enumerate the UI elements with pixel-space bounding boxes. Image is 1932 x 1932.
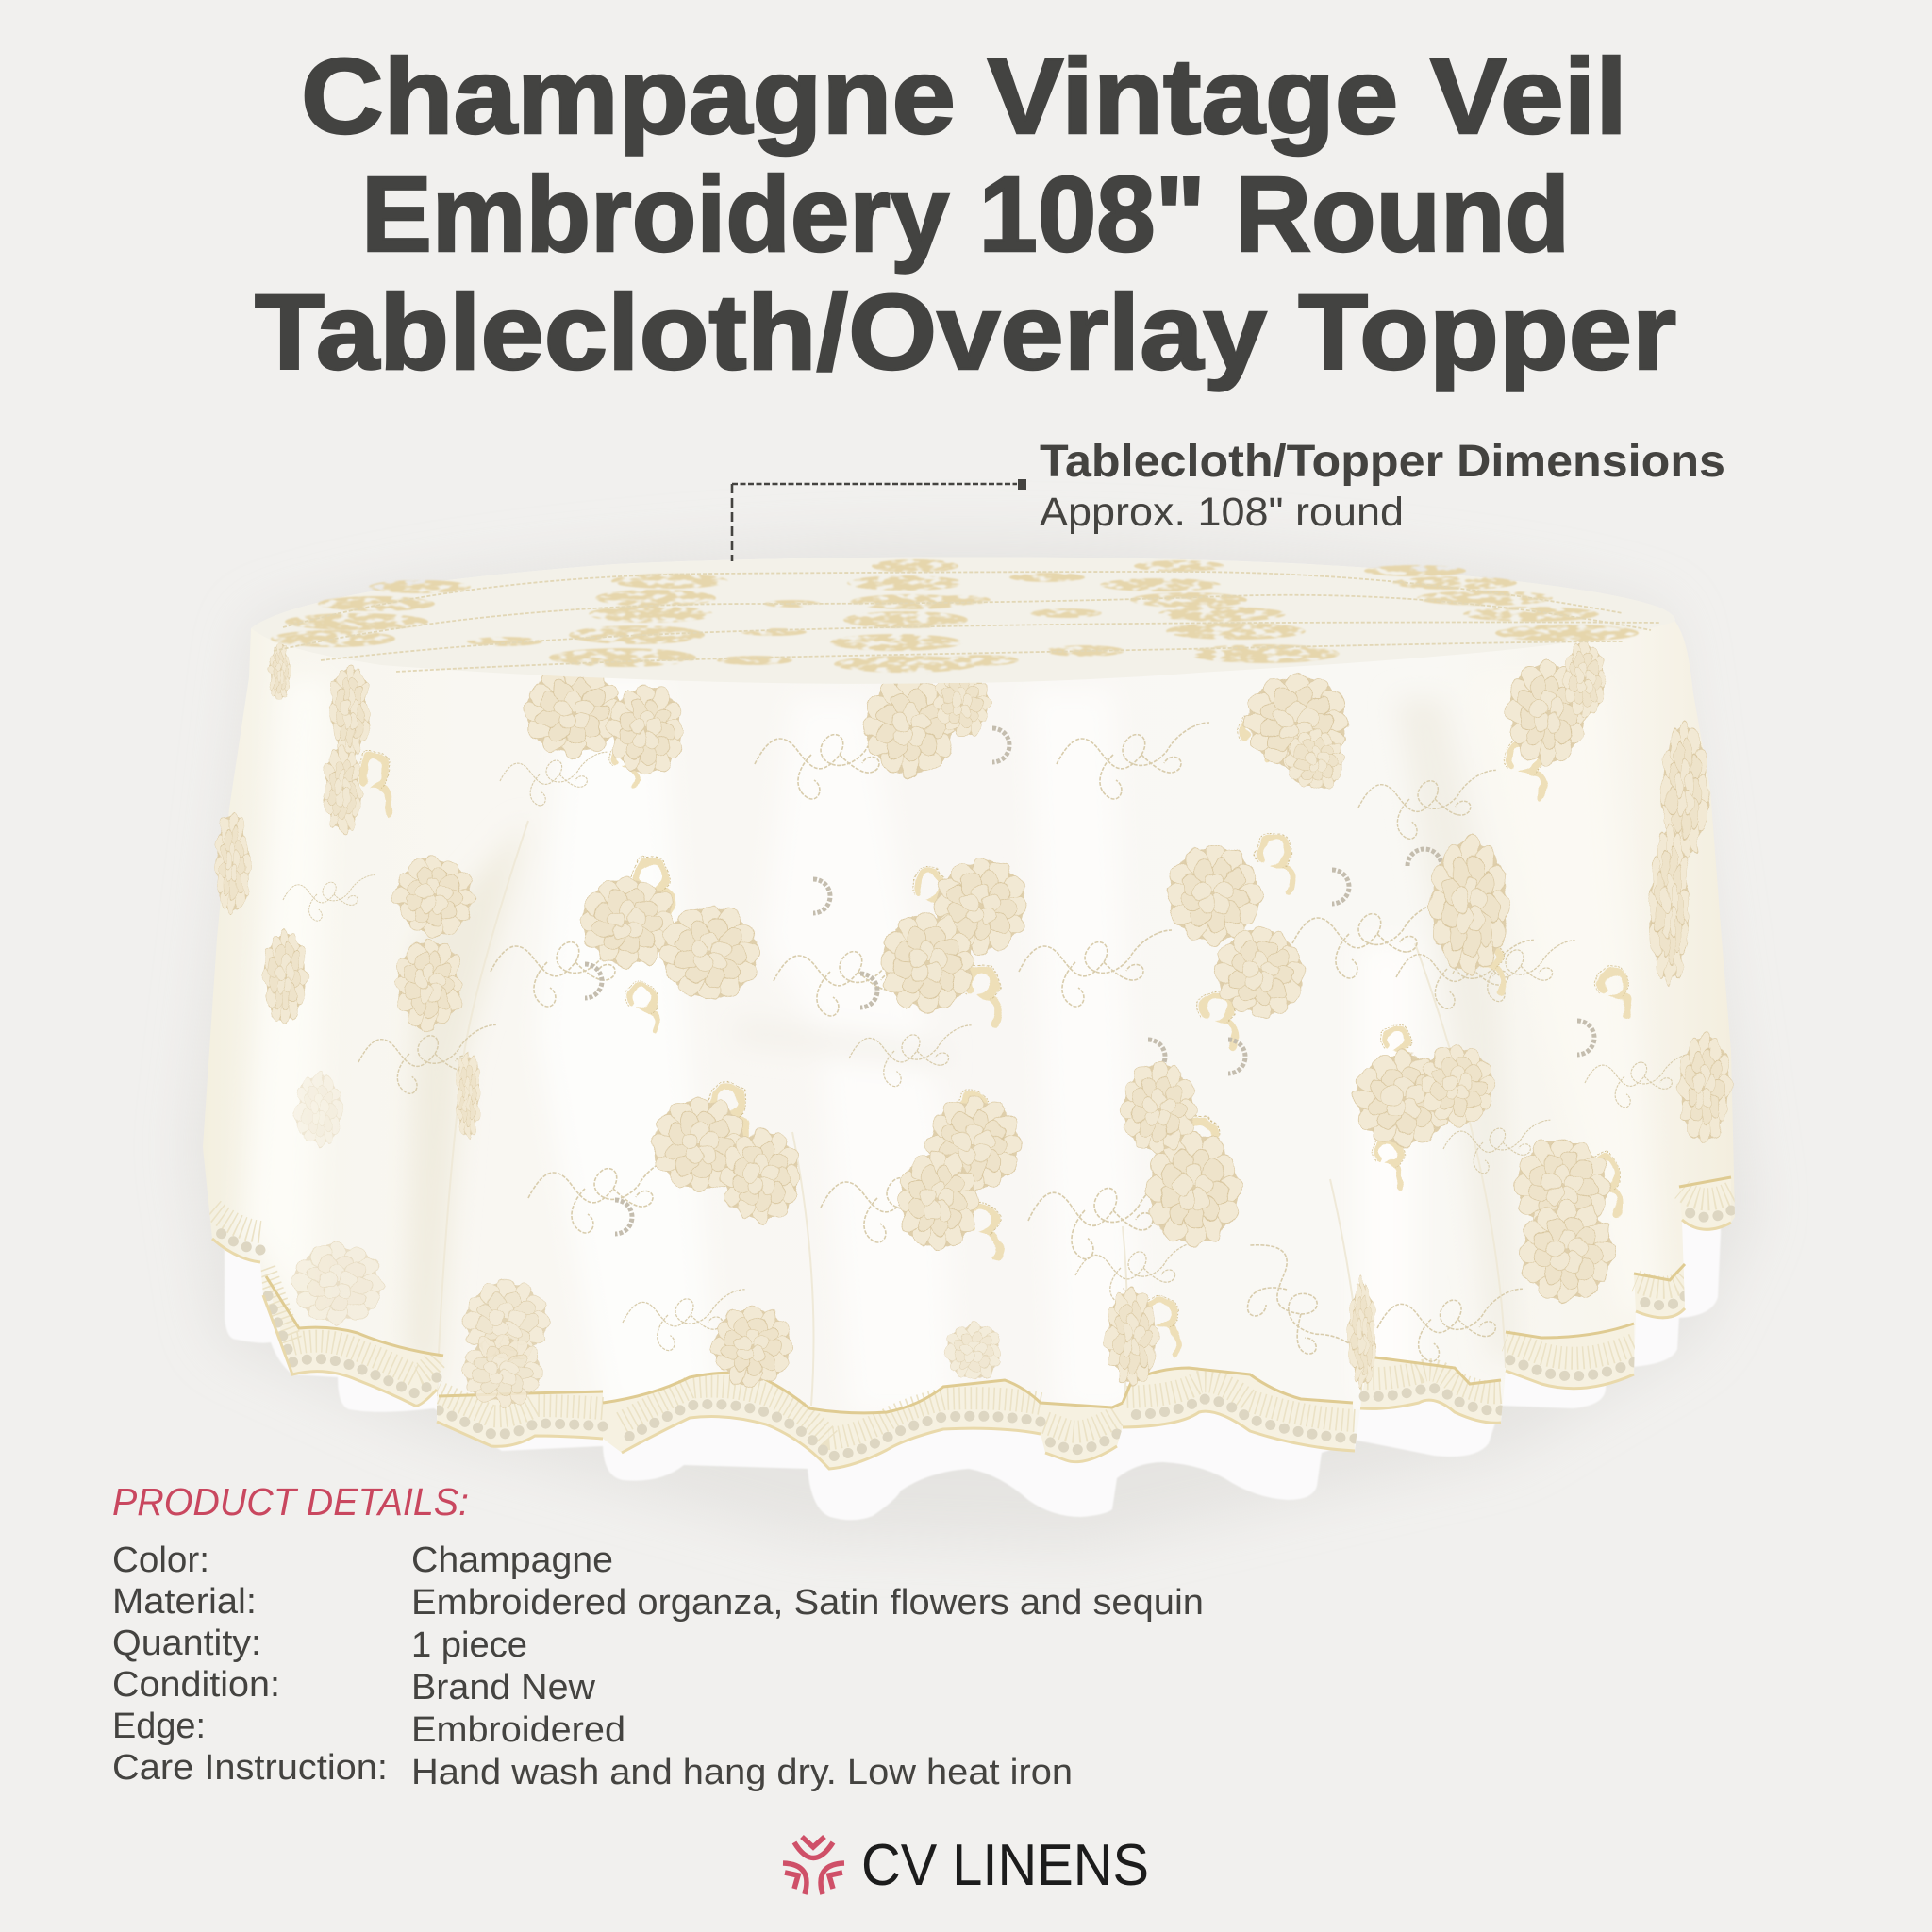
gold hem lines — [266, 1177, 1731, 1413]
details heading: PRODUCT DETAILS: — [112, 1480, 469, 1524]
callout value: Approx. 108" round — [1040, 490, 1404, 535]
logo wordmark: CV LINENS — [861, 1833, 1149, 1898]
title: Embroidery 108" Round — [361, 155, 1570, 274]
detail labels — [112, 1541, 388, 1788]
table top surface — [251, 557, 1675, 684]
detail values: Embroidered organza, Satin flowers and sequin — [411, 1583, 1204, 1623]
detail values: Champagne — [411, 1541, 613, 1580]
embroidered vines — [283, 723, 1691, 1395]
detail labels: Material: — [112, 1582, 257, 1622]
embroidered hem rosettes — [212, 1208, 1731, 1457]
hem bands — [268, 1273, 1684, 1468]
satin flower clusters — [214, 641, 1731, 1407]
detail labels: Care Instruction: — [112, 1748, 388, 1788]
top surface stitching lines — [274, 572, 1660, 672]
dimensions callout — [732, 437, 1725, 561]
title: Tablecloth/Overlay Topper — [255, 273, 1676, 391]
hem pleats — [212, 1190, 1731, 1439]
product details — [112, 1480, 1204, 1792]
tablecloth photo illustration — [189, 538, 1755, 1547]
gold ring ornaments — [358, 665, 1629, 1352]
sequin crescents — [585, 728, 1594, 1234]
detail labels: Color: — [112, 1541, 209, 1580]
gold embroidery on top surface — [271, 559, 1639, 673]
detail values: 1 piece — [411, 1625, 527, 1665]
organza skirt — [203, 622, 1735, 1468]
logo icon — [783, 1837, 844, 1894]
table shadow — [189, 538, 1755, 1547]
callout heading: Tablecloth/Topper Dimensions — [1040, 437, 1725, 487]
detail labels: Edge: — [112, 1707, 206, 1746]
detail values: Hand wash and hang dry. Low heat iron — [411, 1753, 1073, 1792]
scalloped gold hem edge — [212, 1220, 1731, 1469]
white underskirt — [225, 1132, 1721, 1520]
detail values: Brand New — [411, 1668, 596, 1707]
fold edges — [437, 821, 1506, 1424]
CV Linens logo — [783, 1833, 1149, 1898]
detail values — [411, 1541, 1204, 1792]
detail values: Embroidered — [411, 1710, 625, 1750]
title: Champagne Vintage Veil — [301, 37, 1627, 156]
detail labels: Quantity: — [112, 1624, 261, 1663]
detail labels: Condition: — [112, 1665, 280, 1705]
title — [255, 37, 1676, 391]
dashed leader line — [732, 479, 1026, 561]
